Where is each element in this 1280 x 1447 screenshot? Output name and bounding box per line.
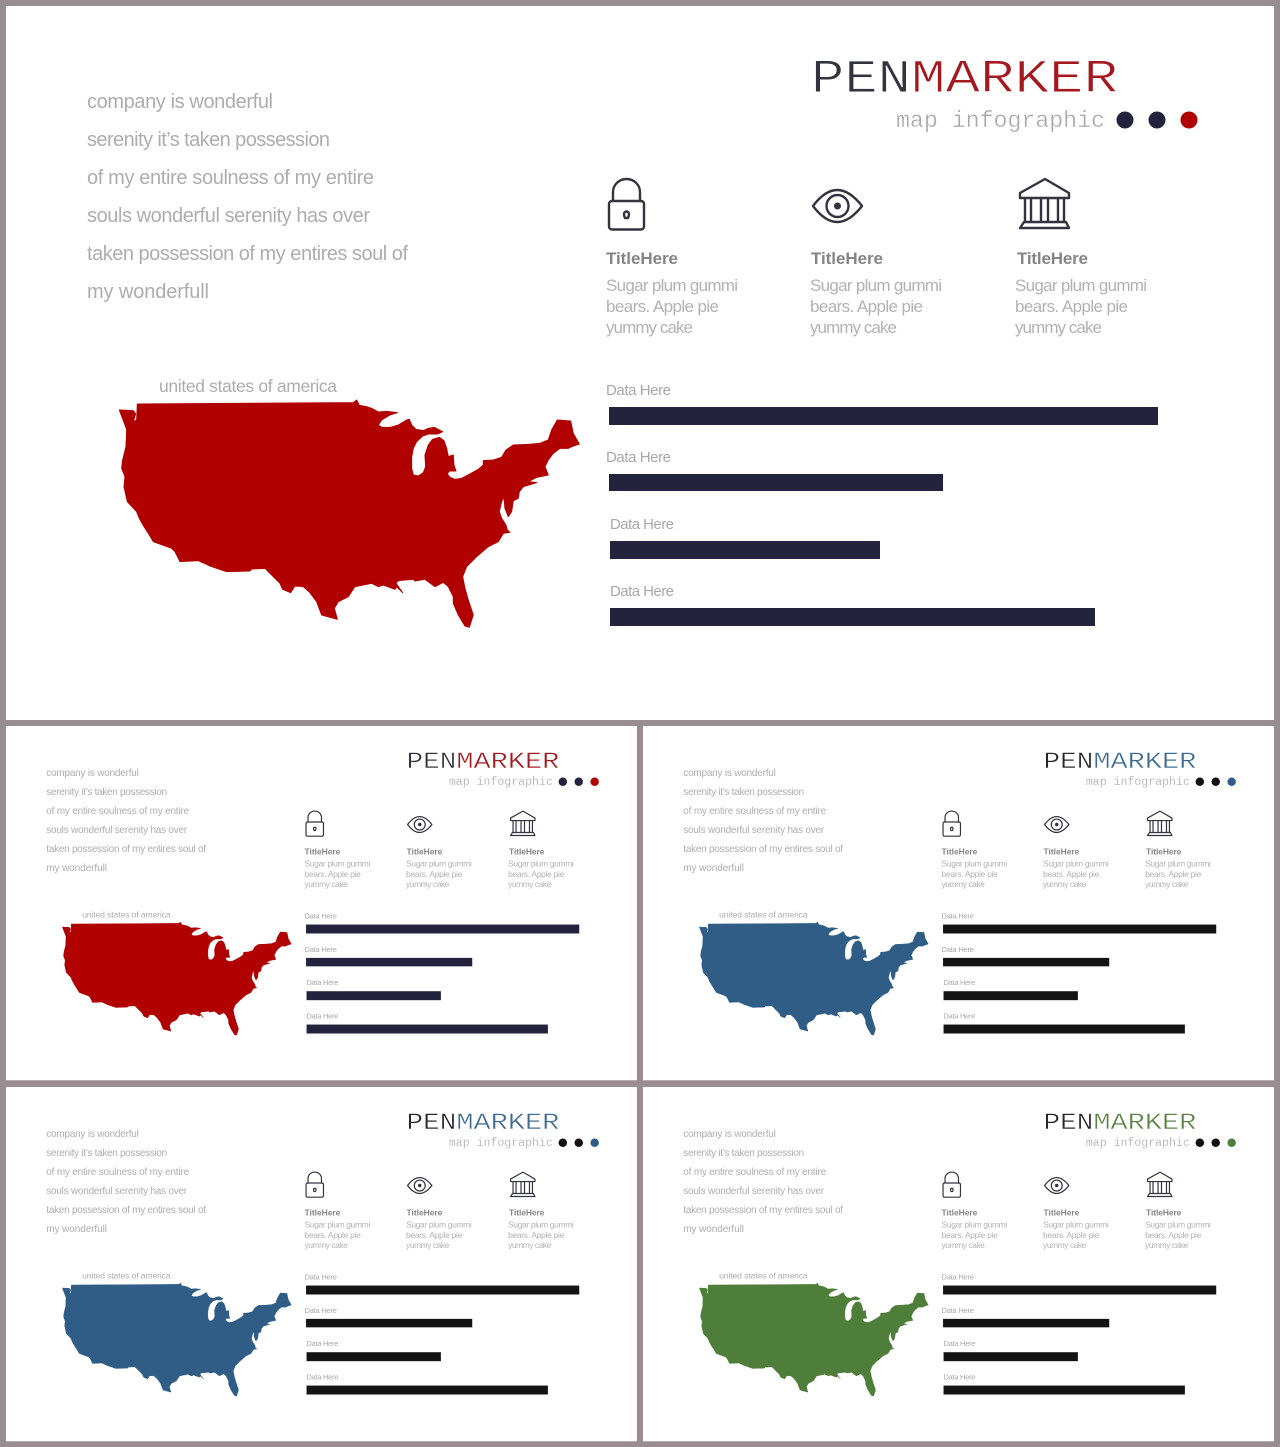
column: title here 3	[508, 1207, 574, 1250]
column: title here 3: Sugar plum gummi	[508, 1219, 574, 1229]
column: title here 2: TitleHere	[811, 249, 883, 268]
column: title here 3: TitleHere	[1146, 1207, 1182, 1217]
icon: eye	[1045, 1178, 1069, 1193]
title: PENMARKER	[407, 750, 559, 776]
icon: lock	[609, 179, 644, 230]
column: title here 2	[810, 249, 942, 337]
icon: bank	[1020, 179, 1069, 228]
bar chart	[305, 912, 579, 1034]
bar chart: Data Here	[606, 382, 671, 399]
bar chart: Data Here	[944, 1373, 975, 1382]
panel: main red slide	[6, 6, 1274, 720]
intro text block: company is wonderful	[683, 768, 776, 779]
column: title here 2	[406, 846, 472, 889]
title: PENMARKER: PEN	[811, 54, 911, 107]
column: title here 2: Sugar plum gummi	[810, 276, 942, 295]
status dots	[559, 777, 599, 786]
column: title here 2: Sugar plum gummi	[406, 1219, 472, 1229]
intro text block: souls wonderful serenity has over	[87, 205, 370, 227]
panel: small green slide	[643, 1087, 1274, 1441]
intro text block: of my entire soulness of my entire	[46, 806, 190, 817]
column: title here 1: TitleHere	[942, 1207, 978, 1217]
map label: united states of america	[159, 376, 337, 396]
title: PENMARKER: PEN	[1044, 1111, 1093, 1137]
column: title here 3: bears. Apple pie	[1145, 869, 1202, 879]
column: title here 1	[305, 1207, 370, 1250]
title: PENMARKER: MARKER	[456, 1111, 559, 1137]
column: title here 2: bears. Apple pie	[406, 869, 463, 879]
column: title here 3: Sugar plum gummi	[1145, 1219, 1211, 1229]
column: title here 2: bears. Apple pie	[810, 297, 923, 316]
column: title here 2: Sugar plum gummi	[1043, 858, 1109, 868]
title: PENMARKER: MARKER	[1093, 1111, 1196, 1137]
intro text block: company is wonderful	[87, 91, 273, 113]
title: PENMARKER: MARKER	[1093, 750, 1196, 776]
column: title here 3	[1145, 846, 1211, 889]
bar chart: Data Here	[606, 449, 671, 466]
map: united states	[119, 400, 579, 627]
column: title here 3: bears. Apple pie	[508, 1230, 565, 1240]
column: title here 1: bears. Apple pie	[942, 869, 998, 879]
icon: lock	[943, 1172, 960, 1197]
column: title here 1: yummy cake	[305, 1240, 348, 1250]
column: title here 3: Sugar plum gummi	[508, 858, 574, 868]
map label: united states of america	[82, 910, 171, 920]
title: PENMARKER	[407, 1111, 559, 1137]
bar chart: Data Here	[942, 945, 974, 954]
title: PENMARKER: MARKER	[911, 54, 1118, 107]
intro text block: serenity it’s taken possession	[46, 787, 167, 798]
column: title here 2: bears. Apple pie	[1043, 869, 1100, 879]
map: united states	[699, 1283, 928, 1396]
column: title here 3	[1145, 1207, 1211, 1250]
bar chart: Data Here	[944, 978, 975, 987]
status dots	[559, 1138, 599, 1147]
column: title here 2: yummy cake	[406, 1240, 450, 1250]
bar chart: Data Here	[305, 945, 337, 954]
subtitle: map infographic	[449, 1137, 553, 1150]
column: title here 2: yummy cake	[1043, 1240, 1087, 1250]
intro text block: of my entire soulness of my entire	[683, 1167, 827, 1178]
intro text block: taken possession of my entires soul of	[683, 844, 843, 855]
column: title here 1: Sugar plum gummi	[942, 1219, 1007, 1229]
intro text block: souls wonderful serenity has over	[46, 825, 188, 836]
intro text block: serenity it’s taken possession	[683, 1148, 804, 1159]
bar chart: Data Here	[942, 1306, 974, 1315]
panel: small blue slide bottom	[6, 1087, 637, 1441]
title: PENMARKER	[1044, 750, 1196, 776]
map: united states	[699, 922, 928, 1035]
column: title here 1: Sugar plum gummi	[942, 858, 1007, 868]
subtitle: map infographic	[449, 776, 553, 789]
icon: bank	[1148, 1172, 1172, 1196]
bar chart: Data Here	[307, 978, 338, 987]
column: title here 2: TitleHere	[407, 1207, 443, 1217]
column: title here 1: bears. Apple pie	[942, 1230, 998, 1240]
column: title here 3: bears. Apple pie	[1145, 1230, 1202, 1240]
column: title here 3	[1015, 249, 1147, 337]
map label: united states of america	[82, 1271, 171, 1281]
column: title here 1: Sugar plum gummi	[606, 276, 738, 295]
bar chart: Data Here	[942, 912, 974, 921]
bar chart: Data Here	[307, 1373, 338, 1382]
title: PENMARKER: PEN	[1044, 750, 1093, 776]
bar chart: Data Here	[942, 1273, 974, 1282]
bar chart: Data Here	[305, 1273, 337, 1282]
column: title here 3: TitleHere	[509, 1207, 545, 1217]
column: title here 1: yummy cake	[606, 318, 693, 337]
column: title here 3	[508, 846, 574, 889]
column: title here 2: yummy cake	[406, 879, 450, 889]
intro text block	[46, 768, 206, 874]
bar chart: Data Here	[944, 1339, 975, 1348]
subtitle: map infographic	[896, 108, 1105, 134]
title: PENMARKER: PEN	[407, 1111, 456, 1137]
intro text block: taken possession of my entires soul of	[46, 844, 206, 855]
column: title here 1: bears. Apple pie	[305, 1230, 361, 1240]
column: title here 3: TitleHere	[509, 846, 545, 856]
subtitle: map infographic	[1086, 1137, 1190, 1150]
bar chart	[606, 382, 1158, 626]
column: title here 2: bears. Apple pie	[406, 1230, 463, 1240]
intro text block: company is wonderful	[46, 768, 139, 779]
intro text block: my wonderfull	[683, 1224, 744, 1235]
column: title here 3: TitleHere	[1017, 249, 1088, 268]
column: title here 1: Sugar plum gummi	[305, 858, 370, 868]
intro text block: company is wonderful	[46, 1129, 139, 1140]
title: PENMARKER: PEN	[407, 750, 456, 776]
map label: united states of america	[719, 910, 808, 920]
intro text block: my wonderfull	[46, 863, 107, 874]
bar chart: Data Here	[610, 583, 674, 600]
column: title here 1: TitleHere	[606, 249, 678, 268]
panel: small red slide	[6, 726, 637, 1080]
bar chart: Data Here	[305, 912, 337, 921]
icon: eye	[408, 817, 432, 832]
bar chart: Data Here	[610, 516, 674, 533]
map: united states	[62, 922, 291, 1035]
column: title here 1: yummy cake	[942, 879, 985, 889]
bar chart	[942, 1273, 1216, 1395]
intro text block: souls wonderful serenity has over	[683, 825, 825, 836]
column: title here 3: TitleHere	[1146, 846, 1182, 856]
column: title here 2: Sugar plum gummi	[1043, 1219, 1109, 1229]
column: title here 3: yummy cake	[508, 879, 552, 889]
column: title here 1	[606, 249, 738, 337]
intro text block	[683, 768, 843, 874]
column: title here 1: yummy cake	[305, 879, 348, 889]
intro text block: souls wonderful serenity has over	[46, 1186, 188, 1197]
bar chart: Data Here	[307, 1339, 338, 1348]
intro text block	[46, 1129, 206, 1235]
column: title here 2: yummy cake	[810, 318, 897, 337]
column: title here 2	[406, 1207, 472, 1250]
column: title here 2: yummy cake	[1043, 879, 1087, 889]
intro text block: taken possession of my entires soul of	[87, 243, 408, 265]
intro text block: company is wonderful	[683, 1129, 776, 1140]
column: title here 2	[1043, 846, 1109, 889]
column: title here 1: bears. Apple pie	[606, 297, 719, 316]
bar chart: Data Here	[305, 1306, 337, 1315]
title: PENMARKER: MARKER	[456, 750, 559, 776]
icon: lock	[306, 811, 323, 836]
intro text block: taken possession of my entires soul of	[683, 1205, 843, 1216]
intro text block	[683, 1129, 843, 1235]
icon: eye	[1045, 817, 1069, 832]
column: title here 1: TitleHere	[942, 846, 978, 856]
icon: lock	[306, 1172, 323, 1197]
title: PENMARKER	[1044, 1111, 1196, 1137]
intro text block: of my entire soulness of my entire	[87, 167, 374, 189]
icon: bank	[511, 811, 535, 835]
icon: bank	[1148, 811, 1172, 835]
column: title here 2: TitleHere	[1044, 846, 1080, 856]
column: title here 3: bears. Apple pie	[508, 869, 565, 879]
column: title here 2: Sugar plum gummi	[406, 858, 472, 868]
panel: small blue slide top	[643, 726, 1274, 1080]
bar chart	[305, 1273, 579, 1395]
intro text block: taken possession of my entires soul of	[46, 1205, 206, 1216]
column: title here 1	[942, 846, 1007, 889]
column: title here 1: TitleHere	[305, 846, 341, 856]
intro text block: my wonderfull	[683, 863, 744, 874]
intro text block	[87, 91, 408, 303]
intro text block: serenity it’s taken possession	[46, 1148, 167, 1159]
bar chart	[942, 912, 1216, 1034]
column: title here 1: Sugar plum gummi	[305, 1219, 370, 1229]
column: title here 3: yummy cake	[1015, 318, 1102, 337]
column: title here 3: yummy cake	[508, 1240, 552, 1250]
intro text block: of my entire soulness of my entire	[46, 1167, 190, 1178]
title: PENMARKER	[811, 54, 1118, 107]
column: title here 1	[305, 846, 370, 889]
column: title here 1: yummy cake	[942, 1240, 985, 1250]
status dots	[1196, 1138, 1236, 1147]
map label: united states of america	[719, 1271, 808, 1281]
intro text block: of my entire soulness of my entire	[683, 806, 827, 817]
bar chart: Data Here	[307, 1012, 338, 1021]
column: title here 1	[942, 1207, 1007, 1250]
intro text block: souls wonderful serenity has over	[683, 1186, 825, 1197]
status dots	[1116, 112, 1198, 128]
column: title here 1: bears. Apple pie	[305, 869, 361, 879]
column: title here 3: yummy cake	[1145, 879, 1189, 889]
column: title here 3: Sugar plum gummi	[1015, 276, 1147, 295]
intro text block: my wonderfull	[87, 281, 209, 303]
icon: eye	[813, 190, 862, 222]
map: united states	[62, 1283, 291, 1396]
intro text block: serenity it’s taken possession	[87, 129, 330, 151]
column: title here 2: TitleHere	[407, 846, 443, 856]
icon: eye	[408, 1178, 432, 1193]
column: title here 3: Sugar plum gummi	[1145, 858, 1211, 868]
bar chart: Data Here	[944, 1012, 975, 1021]
column: title here 2	[1043, 1207, 1109, 1250]
column: title here 3: yummy cake	[1145, 1240, 1189, 1250]
intro text block: serenity it’s taken possession	[683, 787, 804, 798]
column: title here 2: bears. Apple pie	[1043, 1230, 1100, 1240]
status dots	[1196, 777, 1236, 786]
icon: lock	[943, 811, 960, 836]
intro text block: my wonderfull	[46, 1224, 107, 1235]
column: title here 2: TitleHere	[1044, 1207, 1080, 1217]
column: title here 1: TitleHere	[305, 1207, 341, 1217]
subtitle: map infographic	[1086, 776, 1190, 789]
column: title here 3: bears. Apple pie	[1015, 297, 1128, 316]
icon: bank	[511, 1172, 535, 1196]
